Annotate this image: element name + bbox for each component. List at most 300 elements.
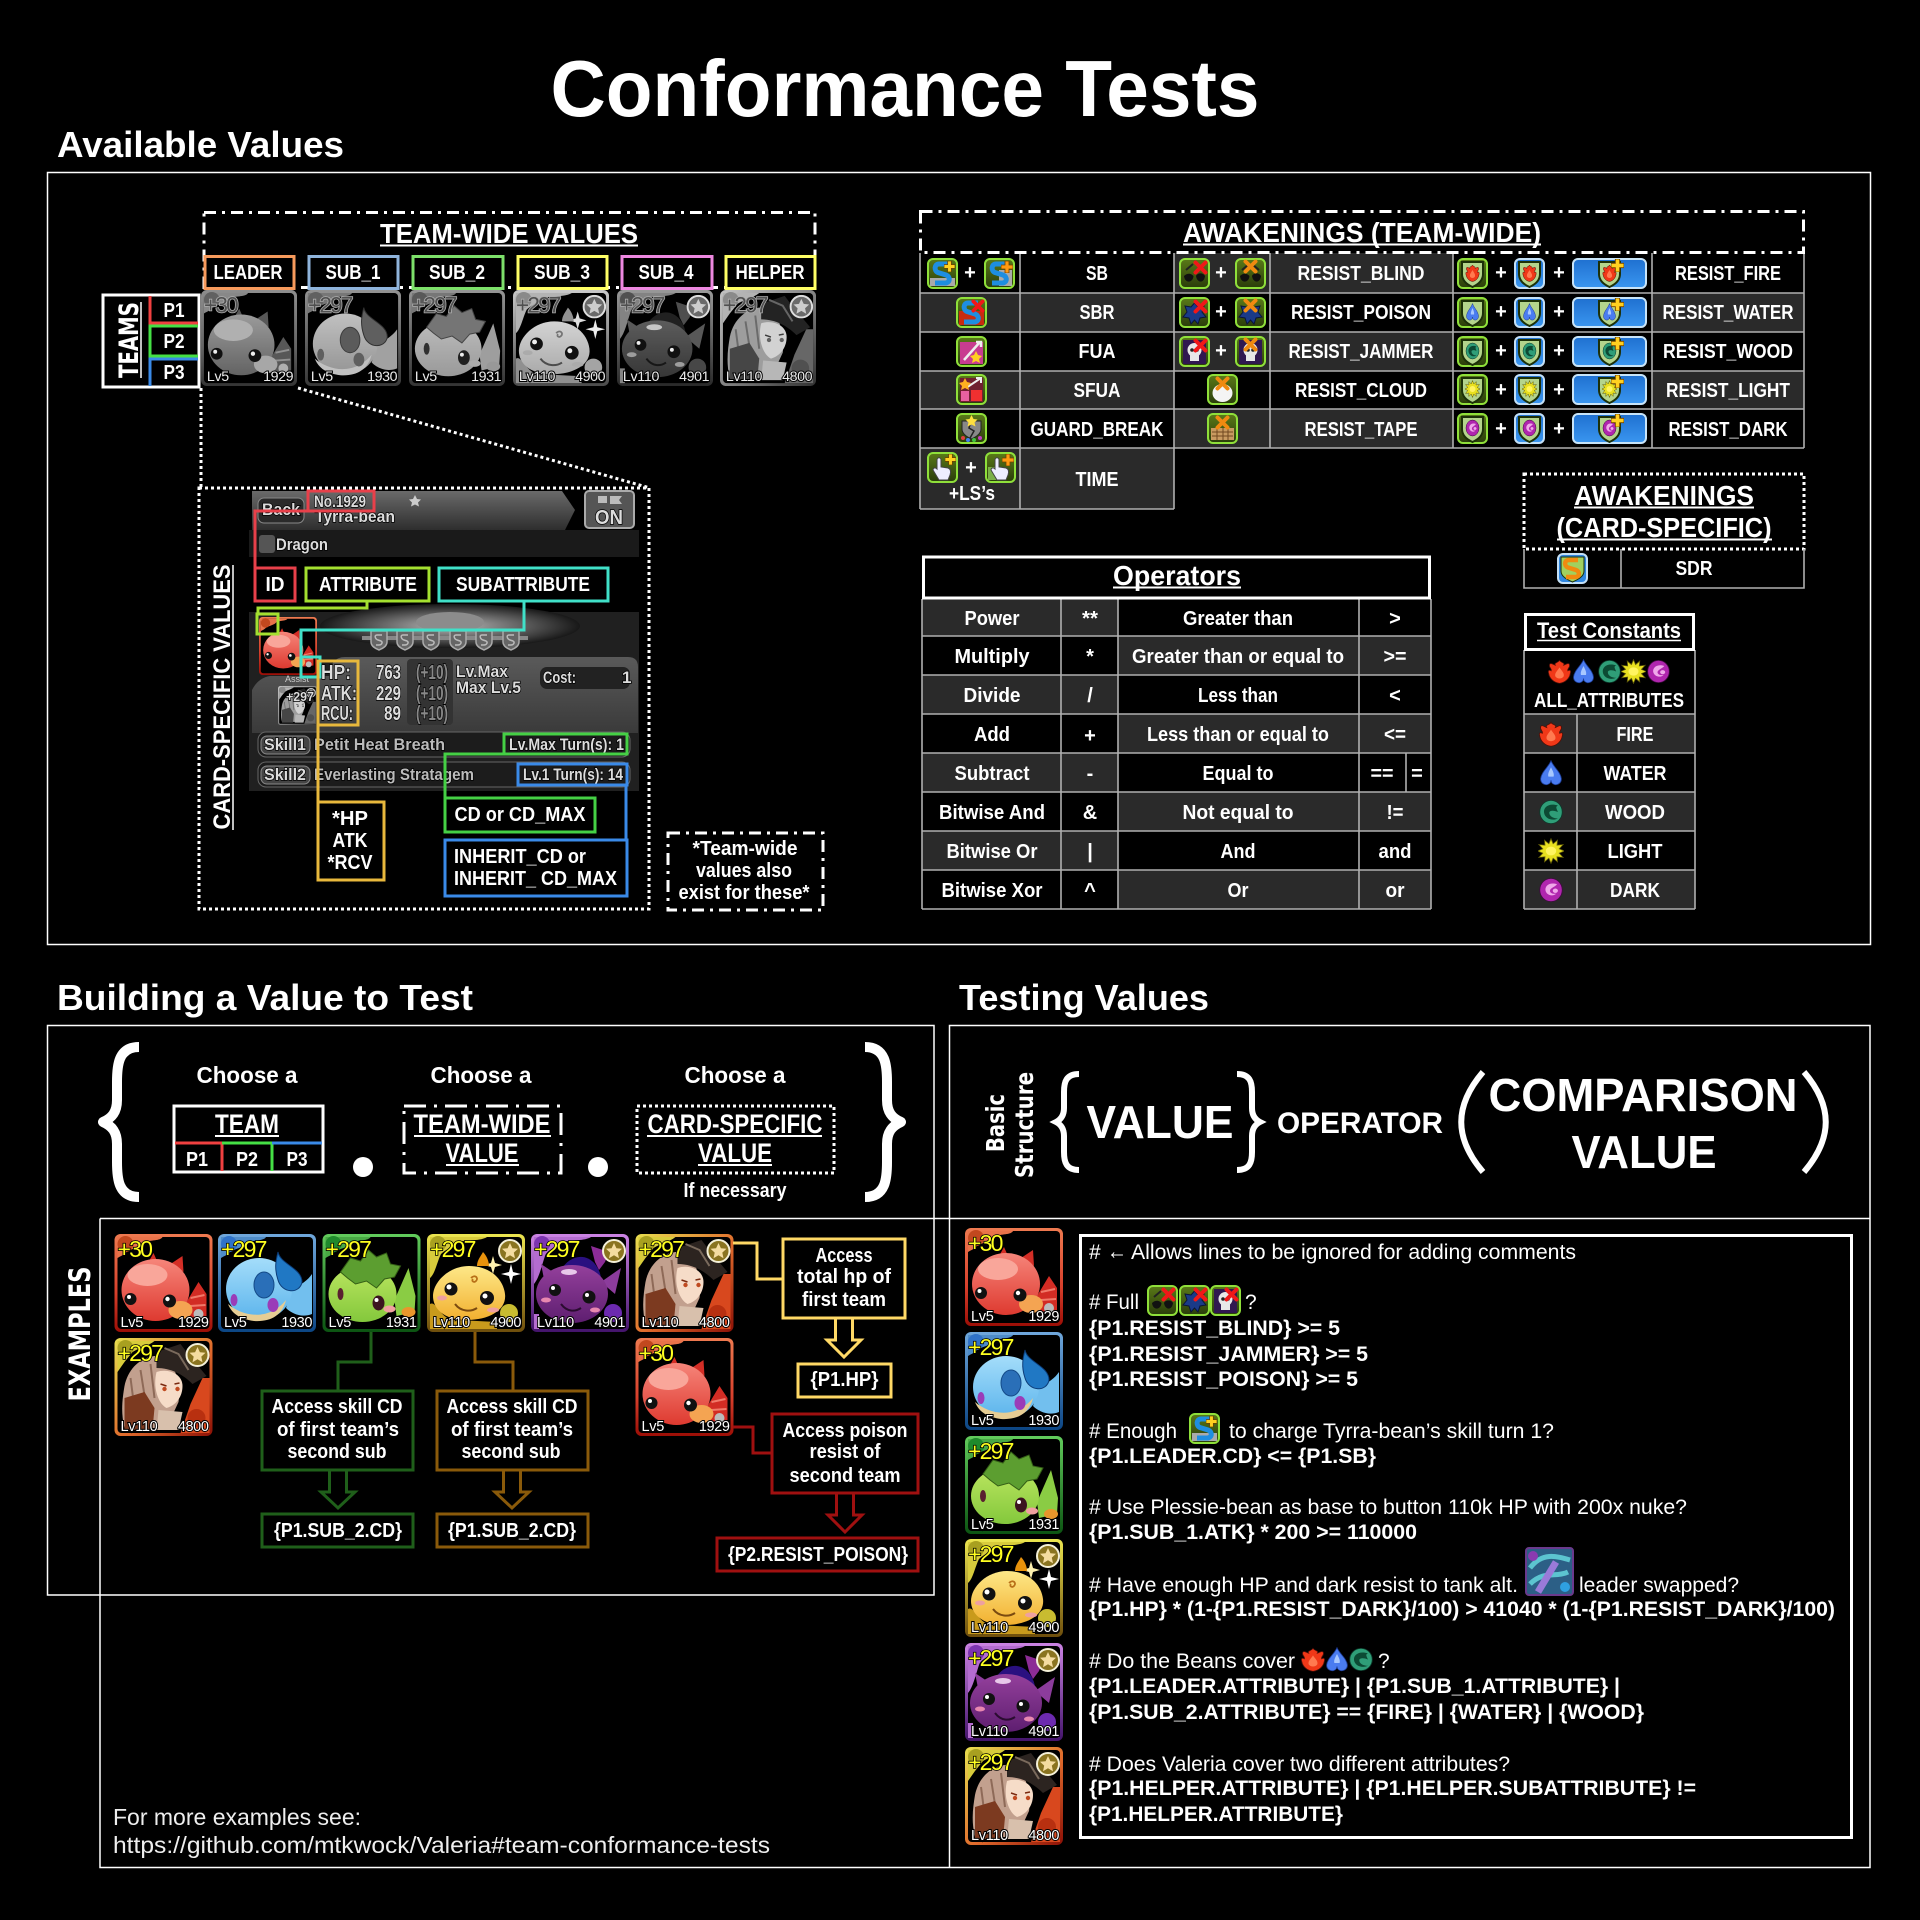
callout: stats: ATK <box>332 830 368 852</box>
card: purple bean: 4901 <box>594 1315 625 1331</box>
row: SBR <box>957 298 1115 327</box>
card: sub 1: 1930 <box>1028 1413 1059 1429</box>
card: purple bean <box>531 1234 629 1332</box>
constant: water <box>1541 761 1667 785</box>
operator rows right: Less than <box>1198 685 1278 707</box>
operator rows right: > <box>1389 608 1401 630</box>
row: SB: SB <box>1086 263 1108 285</box>
operator rows right: Greater than <box>1183 608 1293 630</box>
zoom callout lines <box>201 388 650 488</box>
card: valeria <box>636 1234 734 1332</box>
card: sub 4: Lv110 <box>971 1724 1008 1740</box>
operator rows left: Bitwise And <box>939 802 1045 824</box>
row: RESIST_DARK <box>1458 414 1788 443</box>
example: green sub skill cd: of first team’s <box>277 1419 399 1441</box>
row: RESIST_BLIND: + <box>1215 262 1227 284</box>
panel: card-specific values <box>199 488 649 909</box>
all attributes <box>1534 660 1684 712</box>
card: tyrra-bean: Lv5 <box>120 1315 143 1331</box>
test: resist statuses: {P1.RESIST_POISON} >= 5 <box>1089 1368 1358 1391</box>
row: RESIST_TAPE: RESIST_TAPE <box>1304 419 1418 441</box>
monster info screenshot: (+10) <box>416 703 448 725</box>
label: sub 2 <box>413 256 503 288</box>
label: examples: EXAMPLES <box>63 1266 97 1402</box>
card: sub 2: +297 <box>968 1438 1014 1464</box>
label: sub 4: SUB_4 <box>638 262 694 284</box>
example: total hp <box>733 1239 905 1397</box>
row: RESIST_DARK: RESIST_DARK <box>1668 419 1788 441</box>
monster info screenshot: +297 <box>286 689 314 704</box>
card: leader <box>201 290 297 386</box>
card: leader: +30 <box>204 293 238 318</box>
example: total hp: total hp of <box>797 1266 891 1288</box>
card: leader: 1929 <box>263 369 294 385</box>
choose card-specific value <box>637 1062 834 1202</box>
operator rows right: or <box>1386 880 1405 902</box>
icon: alt leader portrait <box>1526 1548 1573 1595</box>
example: brown sub skill cd: {P1.SUB_2.CD} <box>448 1520 576 1542</box>
constant: wood <box>1540 800 1665 824</box>
test constants heading: Test Constants <box>1537 618 1681 643</box>
comment syntax line: # <box>1089 1241 1101 1264</box>
operator rows right: != <box>1386 802 1404 824</box>
row: GUARD_BREAK <box>957 414 1164 443</box>
heading: building a value: Building a Value to Test <box>57 977 473 1018</box>
callout: inherit cd <box>445 764 627 896</box>
example: brown sub skill cd <box>437 1332 588 1547</box>
basic structure formula: VALUE <box>1572 1126 1716 1178</box>
card: tyrra-bean: 1929 <box>178 1315 209 1331</box>
monster info screenshot: Petit Heat Breath <box>314 735 445 754</box>
right brace <box>865 1047 901 1197</box>
card: sub 1: Lv5 <box>971 1413 994 1429</box>
card: tyrra-bean <box>114 1234 212 1332</box>
test: resist statuses: {P1.RESIST_BLIND} >= 5 <box>1089 1317 1340 1340</box>
choose team: TEAM <box>215 1109 279 1139</box>
card: valeria: Lv110 <box>642 1315 679 1331</box>
operator rows right: == <box>1370 763 1394 785</box>
operator rows left: Power <box>964 608 1020 630</box>
example: poison resist: second team <box>790 1465 900 1487</box>
monster info screenshot: Back <box>262 500 301 519</box>
choose card-specific value: If necessary <box>684 1180 787 1202</box>
test: button nuke: # Use Plessie-bean as base to button 110k HP with 200x nuke? <box>1089 1496 1687 1519</box>
row: RESIST_BLIND <box>1180 259 1424 288</box>
choose card-specific value: Choose a <box>684 1062 786 1088</box>
monster info screenshot: Cost: <box>543 668 576 687</box>
monster info screenshot: 89 <box>384 703 401 725</box>
row: RESIST_CLOUD: RESIST_CLOUD <box>1295 380 1427 402</box>
monster info screenshot: Lv.Max <box>456 662 508 681</box>
testing team cards <box>965 1228 1063 1845</box>
operator rows left: | <box>1087 841 1093 863</box>
row: GUARD_BREAK: GUARD_BREAK <box>1030 419 1164 441</box>
left brace <box>103 1047 139 1197</box>
row: FUA: FUA <box>1078 341 1116 363</box>
test: resist statuses: {P1.RESIST_JAMMER} >= 5 <box>1089 1343 1368 1366</box>
label: helper <box>726 256 815 288</box>
table: awakenings card-specific: SDR <box>1676 558 1713 580</box>
card: yellow bean: 4900 <box>490 1315 521 1331</box>
example: brown sub skill cd: of first team’s <box>451 1419 573 1441</box>
test: attribute coverage <box>1089 1648 1644 1724</box>
choose card-specific value: CARD-SPECIFIC <box>648 1109 822 1139</box>
example: total hp: {P1.HP} <box>810 1369 879 1391</box>
card: sub 1: +297 <box>968 1334 1014 1360</box>
monster info screenshot: ON <box>595 507 623 529</box>
operator rows left: / <box>1087 685 1093 707</box>
card: sub 3 <box>513 290 609 386</box>
card: green bean: Lv5 <box>328 1315 351 1331</box>
card: plessie-bean <box>218 1234 316 1332</box>
link: more examples: https://github.com/mtkwock/Valeria#team-conformance-tests <box>113 1832 770 1858</box>
label: sub 1 <box>309 256 398 288</box>
example cards <box>114 1234 734 1436</box>
callout: stats: *RCV <box>328 852 373 874</box>
card: sub 3: Lv110 <box>971 1620 1008 1636</box>
example: green sub skill cd: Access skill CD <box>272 1396 402 1418</box>
card: leader: 1929 <box>1028 1309 1059 1325</box>
monster info screenshot: (+10) <box>416 662 448 684</box>
link: more examples: For more examples see: <box>113 1804 361 1830</box>
card: sub 4 <box>617 290 713 386</box>
choose team-wide value: TEAM-WIDE <box>414 1109 550 1139</box>
choose team: P3 <box>286 1149 308 1171</box>
test: resist statuses <box>1089 1286 1368 1391</box>
awakenings heading: AWAKENINGS (TEAM-WIDE) <box>1183 217 1541 248</box>
monster info screenshot: ATK: <box>321 683 357 705</box>
choose team: P1 <box>186 1149 208 1171</box>
operator rows right: Less than or equal to <box>1147 724 1329 746</box>
row: FUA <box>957 337 1116 366</box>
callout: subattribute: SUBATTRIBUTE <box>456 574 590 596</box>
table: operators <box>922 557 1431 909</box>
choose team-wide value <box>404 1062 561 1173</box>
example: green sub skill cd: second sub <box>288 1441 386 1463</box>
constant: fire <box>1539 722 1654 746</box>
example: poison resist <box>717 1414 918 1571</box>
constant: light <box>1538 839 1662 863</box>
choose card-specific value: VALUE <box>698 1138 772 1168</box>
row: RESIST_WATER: RESIST_WATER <box>1662 302 1794 324</box>
label: helper: HELPER <box>736 262 805 284</box>
callout: inherit cd: INHERIT_ CD_MAX <box>454 868 618 890</box>
row: TIME <box>928 453 1118 505</box>
row: RESIST_LIGHT <box>1458 375 1790 404</box>
row: RESIST_FIRE: RESIST_FIRE <box>1675 263 1781 285</box>
callout: inherit cd: INHERIT_CD or <box>454 846 586 868</box>
title: Conformance Tests <box>550 44 1260 133</box>
operators heading <box>924 557 1430 598</box>
basic structure formula: COMPARISON <box>1488 1069 1798 1121</box>
card: sub 4: Lv110 <box>623 369 659 385</box>
row: RESIST_JAMMER <box>1180 337 1434 366</box>
card: yellow bean: +297 <box>430 1236 476 1262</box>
value formula <box>103 1047 901 1202</box>
example: green sub skill cd <box>262 1332 413 1547</box>
panel: test examples <box>1080 1236 1852 1838</box>
row: RESIST_WATER: + <box>1553 301 1565 323</box>
operators heading: Operators <box>1113 560 1241 591</box>
card: second team leader: +30 <box>638 1340 673 1366</box>
operator rows right: Greater than or equal to <box>1132 646 1344 668</box>
operator rows left: & <box>1083 802 1097 824</box>
note: team-wide values also exist <box>668 833 823 910</box>
row: SFUA <box>957 375 1120 404</box>
monster info screenshot: Lv.Max Turn(s): 1 <box>509 735 624 754</box>
card: helper <box>720 290 816 386</box>
row: RESIST_POISON: RESIST_POISON <box>1291 302 1431 324</box>
monster info screenshot: Skill2 <box>264 765 306 784</box>
row: SB <box>928 259 1108 288</box>
card: sub 2 <box>965 1436 1063 1534</box>
callout: id <box>255 491 374 601</box>
operator rows right: Not equal to <box>1182 802 1294 824</box>
choose team-wide value: VALUE <box>446 1138 518 1168</box>
row: RESIST_WOOD: RESIST_WOOD <box>1663 341 1793 363</box>
card: sub 4: +297 <box>968 1645 1014 1671</box>
row: RESIST_CLOUD <box>1208 375 1427 404</box>
operator rows left: Add <box>974 724 1010 746</box>
dot separator <box>588 1157 608 1177</box>
row: RESIST_WATER <box>1458 298 1794 327</box>
card: sub 1: Lv5 <box>311 369 333 385</box>
card: sub 3: Lv110 <box>519 369 555 385</box>
card: sub 3: +297 <box>968 1541 1014 1567</box>
constant: dark: DARK <box>1610 880 1660 902</box>
card: helper: Lv110 <box>726 369 762 385</box>
test: skill boost <box>1089 1414 1554 1468</box>
test: button nuke: {P1.SUB_1.ATK} * 200 >= 110000 <box>1089 1521 1417 1544</box>
card: helper: Lv110 <box>971 1828 1008 1844</box>
monster info screenshot: 229 <box>376 683 401 705</box>
test: skill boost: {P1.LEADER.CD} <= {P1.SB} <box>1089 1445 1376 1468</box>
test: attribute coverage: {P1.LEADER.ATTRIBUTE} | {P1.SUB_1.ATTRIBUTE} | <box>1089 1675 1620 1698</box>
greyscale team cards <box>201 290 816 386</box>
card: sub 3: +297 <box>516 293 561 318</box>
monster info screenshot: 1 <box>622 668 631 687</box>
basic structure formula: Basic <box>981 1094 1010 1152</box>
card: green bean: 1931 <box>386 1315 417 1331</box>
monster info screenshot: Lv.1 Turn(s): 14 <box>523 765 623 784</box>
monster info screenshot: Assist <box>285 674 310 684</box>
row: RESIST_WATER: + <box>1495 301 1507 323</box>
card: sub 3: 4900 <box>1028 1620 1059 1636</box>
monster info screenshot: HP: <box>321 662 351 684</box>
teams selector: P3 <box>164 362 184 384</box>
card: second team leader: 1929 <box>699 1419 730 1435</box>
test: helper attributes: # Does Valeria cover two different attributes? <box>1089 1753 1510 1776</box>
row: RESIST_FIRE: + <box>1553 262 1565 284</box>
label: sub 4 <box>622 256 712 288</box>
callout: stats: *HP <box>332 808 368 830</box>
test: skill boost: # Enough <box>1089 1420 1177 1443</box>
monster info screenshot: 763 <box>376 662 401 684</box>
choose team <box>174 1062 323 1172</box>
card: sub 1: 1930 <box>367 369 398 385</box>
operator rows right: and <box>1378 841 1412 863</box>
monster info screenshot: No.1929 <box>314 492 366 511</box>
table: awakenings team-wide <box>920 212 1804 509</box>
test: resist statuses: # Full <box>1089 1291 1139 1314</box>
table: test constants <box>1524 614 1695 909</box>
card: sub 3 <box>965 1539 1063 1637</box>
operator rows right: And <box>1220 841 1256 863</box>
test: helper attributes: {P1.HELPER.ATTRIBUTE} <box>1089 1803 1343 1826</box>
teams selector: TEAMS <box>114 302 145 378</box>
test: tank leader swap <box>1089 1548 1835 1621</box>
note: team-wide values also exist: values also <box>696 860 792 882</box>
row: RESIST_JAMMER: + <box>1215 340 1227 362</box>
constant: light: LIGHT <box>1608 841 1662 863</box>
test: tank leader swap: {P1.HP} * (1-{P1.RESIST_DARK}/100) > 41040 * (1-{P1.RESIST_DARK}/100) <box>1089 1598 1835 1621</box>
card: helper: +297 <box>968 1749 1014 1775</box>
row: RESIST_JAMMER: RESIST_JAMMER <box>1288 341 1434 363</box>
operator rows left: - <box>1087 763 1093 785</box>
row: RESIST_FIRE: + <box>1495 262 1507 284</box>
example: poison resist: resist of <box>810 1441 881 1463</box>
card: helper: +297 <box>723 293 768 318</box>
callout: stats <box>318 661 384 880</box>
choose team-wide value: Choose a <box>430 1062 532 1088</box>
card: green bean <box>322 1234 420 1332</box>
card: sub 2: +297 <box>412 293 457 318</box>
operator rows right: <= <box>1384 724 1406 746</box>
panel: card-specific values: CARD-SPECIFIC VALUES <box>209 564 236 830</box>
panel: team-wide values: TEAM-WIDE VALUES <box>380 218 638 249</box>
card: sub 2: Lv5 <box>415 369 437 385</box>
heading: available values: Available Values <box>57 124 344 165</box>
monster info screenshot: Max Lv.5 <box>456 678 521 697</box>
teams selector: P1 <box>164 300 184 322</box>
operator rows left: Subtract <box>954 763 1030 785</box>
row: RESIST_TAPE <box>1208 414 1418 443</box>
row: SB: + <box>964 262 976 284</box>
operator rows left: Multiply <box>954 646 1030 668</box>
basic structure formula: OPERATOR <box>1277 1107 1443 1140</box>
link: more examples <box>113 1804 770 1858</box>
operator rows right <box>1132 608 1423 902</box>
note: team-wide values also exist: *Team-wide <box>692 838 798 860</box>
operator rows right: < <box>1389 685 1401 707</box>
example: poison resist: {P2.RESIST_POISON} <box>728 1544 908 1566</box>
card: second team leader: Lv5 <box>642 1419 664 1435</box>
example: total hp: Access <box>816 1245 872 1267</box>
card: helper <box>965 1747 1063 1845</box>
card: leader: Lv5 <box>207 369 229 385</box>
row: RESIST_LIGHT: + <box>1495 379 1507 401</box>
card: tyrra-bean: +30 <box>118 1236 152 1262</box>
card: valeria: +297 <box>638 1236 684 1262</box>
monster info screenshot: RCU: <box>321 703 353 725</box>
test: skill boost: to charge Tyrra-bean’s skill turn 1? <box>1229 1420 1554 1443</box>
test: tank leader swap: leader swapped? <box>1579 1574 1739 1597</box>
card: sub 1: +297 <box>308 293 353 318</box>
row: RESIST_WOOD <box>1458 337 1793 366</box>
label: sub 3 <box>518 256 607 288</box>
example: poison resist: Access poison <box>782 1420 908 1442</box>
callout: cd: CD or CD_MAX <box>454 804 586 826</box>
callout: attribute <box>257 568 429 634</box>
test: attribute coverage: # Do the Beans cover <box>1089 1650 1295 1673</box>
example: brown sub skill cd: second sub <box>462 1441 560 1463</box>
row: RESIST_POISON <box>1180 298 1431 327</box>
card: yellow bean: Lv110 <box>433 1315 470 1331</box>
card: leader: Lv5 <box>971 1309 994 1325</box>
card: sub 3: 4900 <box>575 369 606 385</box>
table: awakenings card-specific: (CARD-SPECIFIC) <box>1556 512 1772 543</box>
test: attribute coverage: {P1.SUB_2.ATTRIBUTE} == {FIRE} | {WATER} | {WOOD} <box>1089 1701 1644 1724</box>
comment syntax line: Allows lines to be ignored for adding comments <box>1131 1241 1576 1264</box>
heading: testing values: Testing Values <box>959 977 1209 1018</box>
constant: wood: WOOD <box>1605 802 1665 824</box>
monster info screenshot <box>249 491 639 791</box>
monster info screenshot: Skill1 <box>264 735 306 754</box>
constant: fire: FIRE <box>1616 724 1654 746</box>
card: leader <box>965 1228 1063 1326</box>
card: plessie-bean: 1930 <box>281 1315 312 1331</box>
comment syntax line: ← <box>1107 1238 1127 1265</box>
callout: attribute: ATTRIBUTE <box>319 574 417 596</box>
card: helper: 4800 <box>782 369 813 385</box>
card: helper valeria: Lv110 <box>120 1419 158 1435</box>
card: purple bean: +297 <box>534 1236 580 1262</box>
basic structure formula <box>981 1069 1826 1178</box>
operator rows right: Or <box>1228 880 1249 902</box>
callout: cd <box>445 734 627 832</box>
test: resist statuses: ? <box>1245 1291 1257 1314</box>
card: sub 2: 1931 <box>1028 1517 1059 1533</box>
monster info screenshot: (+10) <box>416 683 448 705</box>
row: RESIST_FIRE <box>1458 259 1781 288</box>
teams selector: P2 <box>164 331 184 353</box>
operator rows left: ^ <box>1084 880 1096 902</box>
choose team: P2 <box>236 1149 258 1171</box>
label: leader <box>205 256 294 288</box>
note: team-wide values also exist: exist for these* <box>678 882 810 904</box>
test: helper attributes: {P1.HELPER.ATTRIBUTE} | {P1.HELPER.SUBATTRIBUTE} != <box>1089 1777 1696 1800</box>
card: valeria: 4800 <box>699 1315 730 1331</box>
card: sub 1 <box>305 290 401 386</box>
row: TIME: TIME <box>1076 469 1118 491</box>
table: awakenings card-specific: AWAKENINGS <box>1574 480 1754 511</box>
row: RESIST_WOOD: + <box>1495 340 1507 362</box>
monster info screenshot: Dragon <box>276 535 328 554</box>
example: green sub skill cd: {P1.SUB_2.CD} <box>274 1520 402 1542</box>
operator rows left: + <box>1084 725 1096 747</box>
card: leader: +30 <box>968 1230 1003 1256</box>
row: RESIST_LIGHT: RESIST_LIGHT <box>1666 380 1790 402</box>
row: RESIST_BLIND: RESIST_BLIND <box>1298 263 1424 285</box>
choose team: Choose a <box>196 1062 298 1088</box>
card: sub 4: 4901 <box>1028 1724 1059 1740</box>
basic structure formula: Structure <box>1010 1072 1039 1178</box>
teams selector <box>103 295 199 387</box>
example: brown sub skill cd: Access skill CD <box>446 1396 578 1418</box>
test: helper attributes <box>1089 1753 1696 1826</box>
card: plessie-bean: +297 <box>221 1236 267 1262</box>
test: attribute coverage: ? <box>1378 1650 1390 1673</box>
constant: dark <box>1540 878 1660 902</box>
row: RESIST_LIGHT: + <box>1553 379 1565 401</box>
test: button nuke <box>1089 1496 1687 1544</box>
operator rows right: >= <box>1384 646 1406 668</box>
label: sub 2: SUB_2 <box>429 262 485 284</box>
operator rows right: Equal to <box>1202 763 1274 785</box>
card: yellow bean <box>427 1234 525 1332</box>
card: helper valeria: 4800 <box>178 1419 209 1435</box>
row: SBR: SBR <box>1080 302 1115 324</box>
